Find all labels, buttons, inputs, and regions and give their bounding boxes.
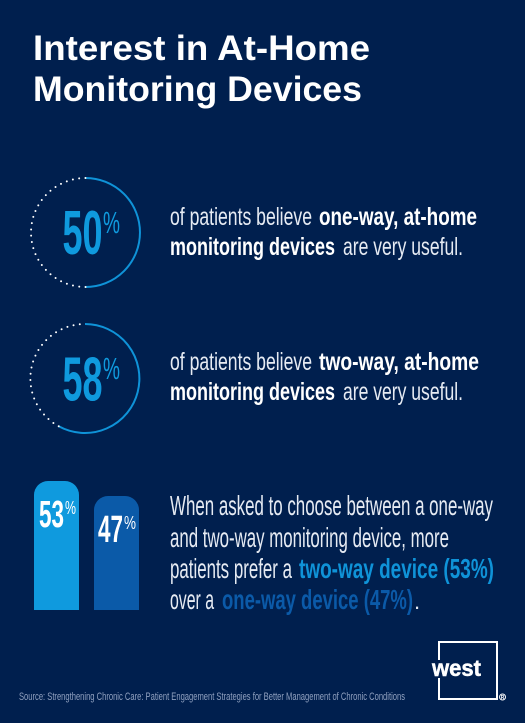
- title: Monitoring Devices: [33, 69, 362, 109]
- stat number: 50%: 50: [62, 199, 102, 268]
- text: preference description: one-way device (47%): [222, 584, 413, 615]
- text: one-way description: of patients believe: [170, 203, 312, 231]
- text: two-way description: are very useful.: [343, 378, 463, 406]
- text: preference description: [170, 490, 494, 615]
- panel: 58% two-way stat: [30, 324, 479, 433]
- text: one-way description: monitoring devices: [170, 233, 335, 261]
- text: one-way description: are very useful.: [343, 233, 463, 261]
- title: Interest in At-Home: [33, 28, 370, 68]
- text: two-way description: of patients believe: [170, 348, 312, 376]
- text: two-way description: two-way, at-home: [319, 348, 479, 376]
- stat number: 58%: 58: [62, 346, 102, 414]
- logo: west: west: [431, 655, 481, 681]
- bar: two-way 53%: 53: [39, 494, 64, 536]
- stat number: 50%: %: [103, 205, 120, 240]
- logo: west: [431, 642, 506, 701]
- bar: two-way 53%: %: [65, 498, 76, 518]
- text: two-way description: [170, 348, 479, 406]
- text: preference description: .: [414, 589, 420, 614]
- text: one-way description: one-way, at-home: [319, 203, 477, 231]
- chart: 50% radial gauge: [31, 178, 140, 287]
- text: preference description: patients prefer a: [170, 553, 292, 584]
- bar: one-way 47%: %: [124, 513, 136, 533]
- logo: west: R: [501, 695, 505, 701]
- panel: 50% one-way stat: [31, 178, 477, 287]
- text: one-way description: [170, 203, 477, 261]
- bar: one-way 47%: 47: [98, 509, 123, 551]
- bar: two-way 53%: [34, 481, 79, 610]
- bar: one-way 47%: [94, 496, 139, 610]
- chart: 58% radial gauge: [30, 324, 139, 433]
- text: preference description: over a: [170, 584, 214, 615]
- title: [33, 28, 370, 109]
- bar chart: 53% vs 47%: [34, 481, 139, 610]
- stat number: 58%: %: [103, 351, 120, 386]
- text: two-way description: monitoring devices: [170, 378, 335, 406]
- panel: preference comparison: [34, 481, 494, 615]
